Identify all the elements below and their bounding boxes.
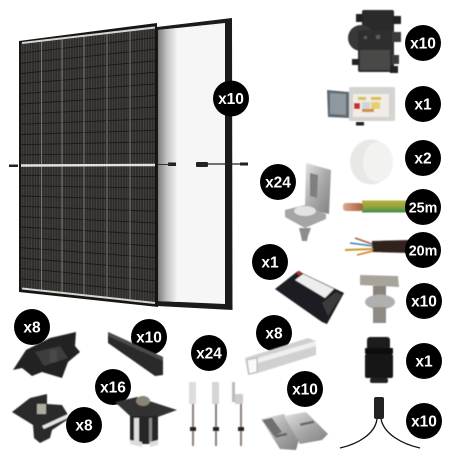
badge: aluminium rail x8 (256, 315, 292, 351)
badge: panels x10 (213, 80, 249, 116)
busbars (42, 29, 130, 301)
badge: microinverter x10: x10 (410, 36, 436, 52)
distribution box (327, 87, 395, 126)
solar panel: rear view (157, 18, 248, 310)
cable gland (365, 337, 393, 383)
badge: mid clamp x16: x16 (100, 380, 126, 396)
junction box (350, 140, 393, 184)
flat hooks (261, 412, 328, 450)
microinverter (348, 10, 401, 73)
L bracket (285, 163, 331, 241)
solar panel: front view (9, 23, 158, 307)
badge: T-bolt x10: x10 (411, 294, 437, 310)
badge: cable gland x1 (406, 343, 442, 379)
end clamp lower (12, 394, 70, 443)
badge: Y branch cable x10: x10 (411, 414, 437, 430)
badge: mid clamp x16 (95, 369, 131, 405)
badge: screws x24 (191, 335, 227, 371)
badge: end clamp x8: x8 (23, 320, 41, 336)
badge: Y branch cable x10 (406, 403, 442, 439)
badge: roof bracket x24 (260, 164, 296, 200)
power cable (345, 238, 410, 255)
badge: monitoring gateway x1 (252, 244, 288, 280)
badge: rail x10: x10 (136, 330, 162, 346)
badge: monitoring gateway x1: x1 (261, 254, 279, 272)
badge: rail x10 (131, 319, 167, 355)
badge: cable gland x1: x1 (415, 354, 433, 370)
badge: end clamp x8 lower (66, 407, 102, 443)
badge: roof bracket x24: x24 (265, 174, 291, 192)
badge: junction box x2: x2 (414, 150, 432, 168)
badge: end clamp x8 lower: x8 (75, 418, 93, 434)
badge: distribution box x1 (405, 86, 441, 122)
aluminium rail (245, 338, 316, 375)
earth cable (343, 200, 412, 212)
end clamp (13, 332, 80, 378)
badge: T-bolt x10 (406, 283, 442, 319)
badge: distribution box x1: x1 (414, 96, 432, 114)
cell rows (21, 38, 155, 292)
mid clamp (115, 396, 177, 447)
badge: flat hooks x10 (287, 371, 323, 407)
black rail (108, 332, 163, 376)
Y branch cable (340, 397, 420, 448)
badge: panels x10: x10 (218, 91, 244, 108)
T-bolt (360, 275, 399, 323)
badge: screws x24: x24 (196, 346, 222, 362)
badge: aluminium rail x8: x8 (265, 326, 283, 342)
badge: microinverter x10 (405, 25, 441, 61)
badge: end clamp x8 (14, 309, 50, 345)
badge: power cable 20m (405, 232, 441, 268)
rear junction cable (157, 162, 248, 167)
badge: earth cable 25m (405, 189, 441, 225)
screws (189, 382, 244, 446)
badge: earth cable 25m: 25m (409, 200, 437, 216)
badge: flat hooks x10: x10 (292, 382, 318, 398)
badge: junction box x2 (405, 140, 441, 176)
left connector (9, 164, 18, 167)
badge: power cable 20m: 20m (409, 244, 437, 260)
monitoring gateway (275, 271, 344, 324)
